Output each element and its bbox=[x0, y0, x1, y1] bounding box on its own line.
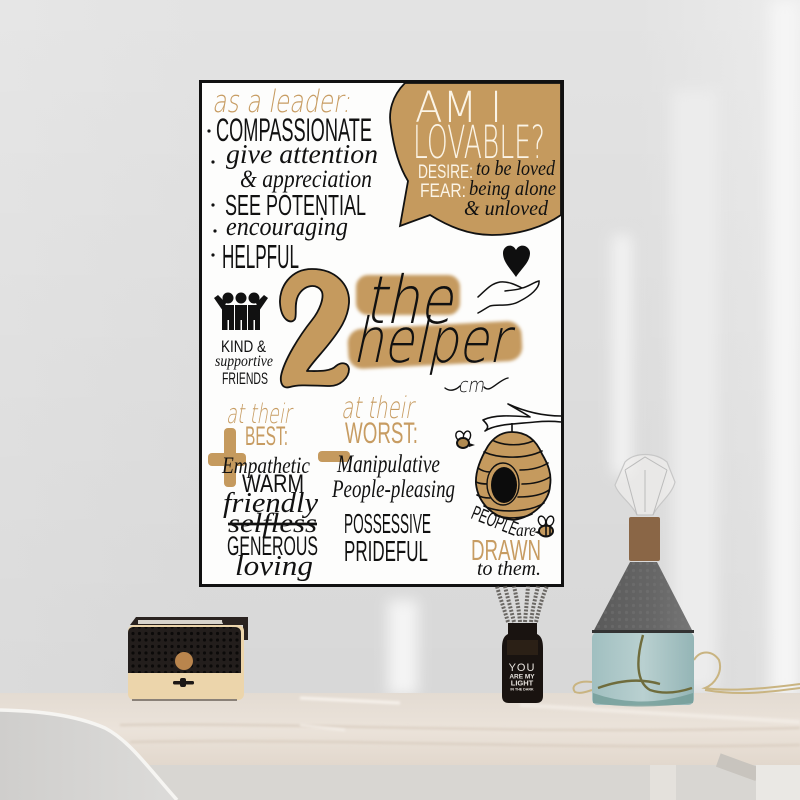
column: at their worst: WORST: bbox=[345, 417, 418, 450]
area under table bbox=[0, 753, 800, 800]
text: kind and supportive friends: FRIENDS bbox=[222, 369, 268, 388]
big number 2 bbox=[280, 269, 349, 387]
list: leader traits: HELPFUL bbox=[222, 238, 299, 275]
title: the helper: the bbox=[361, 262, 465, 339]
speech bubble: am I lovable: LOVABLE? bbox=[413, 116, 545, 169]
text: kind and supportive friends: supportive bbox=[215, 353, 273, 370]
column: at their best: WARM bbox=[242, 470, 304, 498]
text: people are drawn to them bbox=[468, 502, 541, 580]
icon: group of friends bbox=[214, 292, 268, 330]
poster frame bbox=[199, 80, 564, 587]
signature: cm bbox=[445, 373, 508, 397]
list: leader traits: COMPASSIONATE bbox=[216, 112, 372, 148]
speech bubble: am I lovable: to be loved bbox=[476, 156, 555, 180]
column: at their best: Empathetic bbox=[221, 453, 310, 478]
lamp bbox=[574, 454, 800, 706]
speech bubble: am I lovable: AM I bbox=[415, 83, 502, 133]
speech bubble: am I lovable bbox=[390, 83, 561, 235]
text: people are drawn to them: to them. bbox=[477, 558, 541, 580]
icon: branch bbox=[483, 404, 561, 431]
column: at their best: GENEROUS bbox=[227, 531, 318, 561]
vase with lavender: ARE MY bbox=[509, 674, 535, 680]
brush stroke: helper bbox=[347, 320, 523, 370]
vase with lavender: YOU bbox=[509, 662, 535, 674]
text: people are drawn to them: DRAWN bbox=[471, 535, 541, 567]
icon: bee upper bbox=[454, 430, 475, 448]
speech bubble: am I lovable: FEAR: bbox=[420, 181, 466, 202]
icon: heart bbox=[503, 246, 530, 277]
list: leader traits: give attention bbox=[226, 139, 378, 169]
text: kind and supportive friends: KIND & bbox=[221, 337, 267, 356]
title: the helper: helper bbox=[349, 305, 520, 377]
heading: as a leader: as a leader: bbox=[211, 84, 355, 120]
list: leader traits: & appreciation bbox=[240, 166, 372, 193]
radio bbox=[128, 617, 248, 701]
icon: open hand bbox=[478, 281, 539, 313]
icon: beehive bbox=[476, 423, 551, 520]
table top bbox=[0, 693, 800, 765]
vase with lavender bbox=[497, 586, 547, 703]
column: at their best: friendly bbox=[223, 488, 319, 519]
column: at their best bbox=[208, 399, 319, 582]
column: at their worst: People-pleasing bbox=[331, 476, 455, 503]
list: leader traits bbox=[207, 112, 378, 275]
column: at their worst: Manipulative bbox=[336, 451, 440, 478]
text: people are drawn to them: PEOPLE bbox=[468, 502, 521, 541]
speech bubble: am I lovable: being alone bbox=[469, 176, 556, 200]
column: at their worst: POSSESSIVE bbox=[344, 508, 431, 539]
text: people are drawn to them: are bbox=[516, 520, 536, 540]
column: at their best: loving bbox=[235, 551, 313, 582]
chair bbox=[0, 710, 177, 800]
list: leader traits: SEE POTENTIAL bbox=[225, 190, 366, 222]
column: at their best: selfless bbox=[228, 508, 317, 538]
brush stroke: the bbox=[356, 275, 460, 315]
text: kind and supportive friends bbox=[215, 337, 273, 388]
icon: bee lower bbox=[534, 515, 555, 536]
column: at their best: BEST: bbox=[245, 421, 288, 451]
signature: cm: cm bbox=[457, 373, 487, 397]
column: at their worst: at their bbox=[340, 391, 418, 426]
column: at their best: at their bbox=[225, 399, 296, 430]
vase with lavender: IN THE DARK bbox=[510, 688, 534, 692]
title: the helper bbox=[349, 262, 520, 377]
column: at their worst bbox=[318, 391, 455, 568]
column: at their worst: PRIDEFUL bbox=[344, 536, 428, 568]
speech bubble: am I lovable: DESIRE: bbox=[418, 162, 473, 183]
vase with lavender: LIGHT bbox=[511, 678, 534, 688]
list: leader traits: encouraging bbox=[226, 212, 348, 241]
speech bubble: am I lovable: & unloved bbox=[464, 196, 548, 220]
